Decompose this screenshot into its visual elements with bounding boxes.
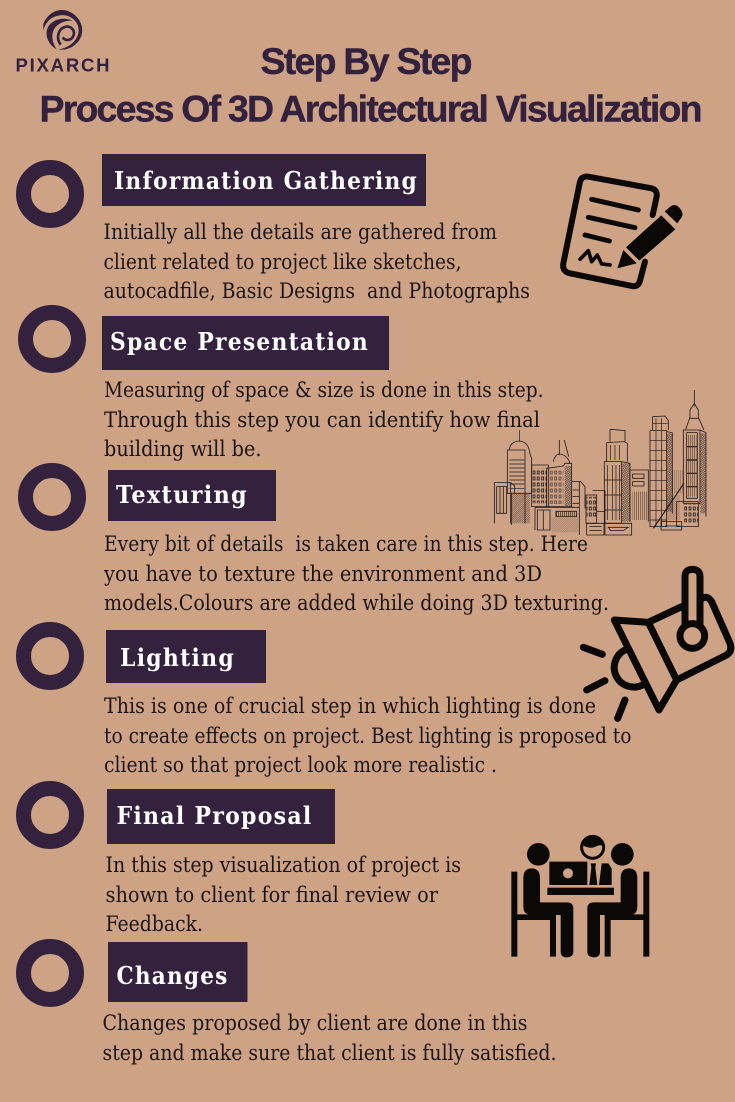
- table: [547, 888, 614, 895]
- body text: Measuring of space & size is done in this step.: [104, 378, 544, 403]
- ring marker: [24, 630, 76, 682]
- title line 1: Step By Step: [260, 40, 472, 82]
- body text: Feedback.: [106, 912, 203, 937]
- body text: building will be.: [104, 437, 262, 462]
- heading bar: [102, 154, 426, 206]
- heading bar: [106, 630, 266, 683]
- body text: This is one of crucial step in which lighting is done: [104, 694, 596, 719]
- body text: shown to client for final review or: [106, 883, 439, 908]
- body text: to create effects on project. Best lighting is proposed to: [104, 724, 632, 749]
- title line 2: Process Of 3D Architectural Visualization: [40, 88, 702, 130]
- icon: swirl mark: [43, 10, 82, 50]
- icon: city skyline sketch: [494, 390, 706, 535]
- body text: Through this step you can identify how final: [104, 408, 540, 433]
- body text: models.Colours are added while doing 3D texturing.: [104, 591, 609, 616]
- step 5: final proposal: [24, 788, 461, 937]
- step 2: space presentation: [26, 312, 544, 462]
- body text: client related to project like sketches,: [104, 250, 462, 275]
- heading text: Texturing: [116, 480, 248, 509]
- heading text: Information Gathering: [114, 166, 418, 195]
- body text: step and make sure that client is fully satisfied.: [102, 1041, 556, 1066]
- step 4: lighting: [24, 630, 632, 778]
- body text: [104, 378, 544, 462]
- heading text: Final Proposal: [116, 801, 312, 830]
- body text: [106, 853, 461, 937]
- heading bar: [108, 470, 276, 521]
- body text: [104, 220, 530, 304]
- title: [40, 40, 702, 130]
- step 6: changes: [24, 942, 556, 1066]
- heading bar: [107, 789, 335, 844]
- step 1: information gathering: [24, 154, 530, 304]
- ring marker: [26, 470, 78, 524]
- body text: [103, 532, 609, 616]
- grid tower: [650, 416, 684, 530]
- logo wordmark: PIXARCH: [16, 54, 110, 76]
- body text: you have to texture the environment and 3D: [103, 562, 542, 587]
- icon: megaphone: [583, 569, 731, 718]
- heading text: Lighting: [120, 643, 235, 672]
- ring marker: [26, 312, 78, 366]
- spire tower: [677, 390, 706, 527]
- body text: client so that project look more realistic .: [104, 753, 497, 778]
- body text: autocadfile, Basic Designs and Photographs: [104, 279, 530, 304]
- domed tower: [494, 430, 532, 525]
- tall central tower: [604, 429, 648, 523]
- laptop: [549, 862, 587, 885]
- twin spire block: [532, 440, 579, 535]
- body text: Changes proposed by client are done in this: [102, 1011, 528, 1036]
- ring marker: [24, 168, 76, 220]
- heading text: Changes: [116, 961, 228, 990]
- ring marker: [24, 788, 76, 842]
- presenter: [582, 836, 612, 885]
- icon: document and pencil: [563, 177, 682, 286]
- ring marker: [24, 946, 76, 1000]
- mid blocks: [572, 482, 632, 535]
- left person and chair: [511, 843, 573, 957]
- heading bar: [108, 942, 248, 1002]
- body text: [104, 694, 632, 778]
- heading bar: [102, 316, 389, 370]
- right person and chair: [587, 843, 649, 957]
- body text: Every bit of details is taken care in this step. Here: [104, 532, 588, 557]
- body text: In this step visualization of project is: [106, 853, 461, 878]
- icon: client meeting: [511, 836, 649, 957]
- step 3: texturing: [26, 470, 609, 616]
- body text: [102, 1011, 556, 1066]
- logo: Pixarch: [16, 10, 110, 76]
- heading text: Space Presentation: [110, 327, 369, 356]
- body text: Initially all the details are gathered from: [104, 220, 497, 245]
